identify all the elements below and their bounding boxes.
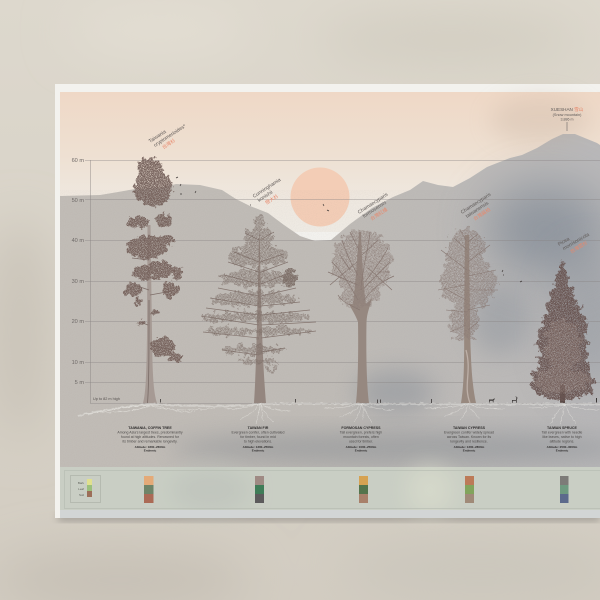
- description: Formosan cypress: Altitude: 1000–2500m: [346, 445, 377, 449]
- tree: Taiwania: [124, 158, 183, 403]
- poster drop shadow: [58, 513, 600, 521]
- description: Taiwan coffin tree: its timber and remarkable longevity.: [122, 440, 178, 444]
- label: Chamaecyparis taiwanensis: taiwanensis: [465, 200, 490, 220]
- label: Chamaecyparis taiwanensis: [460, 191, 499, 226]
- Xueshan peak callout: (Snow mountain): [553, 113, 582, 117]
- sun: [290, 168, 350, 226]
- description: Taiwan spruce: Tall evergreen with needle: [542, 430, 582, 434]
- legend key: Soil: [79, 493, 84, 497]
- description: Taiwan coffin tree: [117, 426, 183, 452]
- description: Formosan cypress: [340, 426, 382, 452]
- label: Chamaecyparis formosensis: formosensis: [362, 200, 388, 220]
- height scale: 30 m: [72, 279, 84, 285]
- legend key: [70, 476, 100, 502]
- people and animals for scale: [160, 396, 597, 403]
- species descriptions: [117, 426, 582, 452]
- description: Taiwan cypress: [444, 426, 494, 452]
- label: Chamaecyparis formosensis: Chamaecyparis: [357, 191, 390, 216]
- height scale: 10 m: [72, 360, 84, 366]
- label: Chamaecyparis taiwanensis: 台灣扁柏: [472, 206, 492, 222]
- height scale: 20 m: [72, 319, 84, 325]
- light and leaf shadows: [170, 96, 600, 464]
- poster frame: [55, 84, 600, 518]
- description: Formosan cypress: Endemic: [355, 448, 368, 452]
- label: Chamaecyparis taiwanensis: Chamaecyparis: [460, 191, 493, 216]
- description: Taiwan coffin tree: TAIWANIA, COFFIN TREE: [128, 426, 172, 430]
- film grain: [60, 190, 600, 468]
- description: Taiwan spruce: TAIWAN SPRUCE: [547, 426, 578, 430]
- description: Taiwan cypress: Evergreen conifer widely spread: [444, 430, 494, 434]
- description: Taiwan fir: TAIWAN FIR: [248, 426, 269, 430]
- height scale: 40 m: [72, 238, 84, 244]
- description: Formosan cypress: Tall evergreen, prefers high: [340, 430, 382, 434]
- label: Picea: morrisonicola: [562, 232, 591, 252]
- legend key: Leaf: [78, 487, 84, 491]
- mountain ridge: [60, 134, 600, 467]
- Xueshan peak callout: [551, 106, 584, 131]
- label: Taiwania: 台灣杉: [161, 137, 177, 151]
- tree: Formosan cypress: [328, 230, 394, 403]
- label: Chamaecyparis formosensis: [357, 191, 396, 226]
- legend key: Bark: [78, 481, 84, 485]
- Xueshan peak callout: 3,886 m: [560, 118, 574, 122]
- label: Cunninghamia: [252, 177, 289, 210]
- tree: Taiwan cypress: [438, 228, 498, 403]
- height scale: 50 m: [72, 198, 84, 204]
- tree: Taiwan spruce: [528, 260, 596, 403]
- description: Taiwan cypress: Endemic: [463, 448, 476, 452]
- description: Taiwan fir: to high elevations.: [244, 440, 272, 444]
- colour swatches: Taiwan spruce: [560, 476, 568, 503]
- height scale: [72, 158, 600, 404]
- height scale: 60 m: [72, 158, 84, 164]
- colour swatches: Taiwania: [144, 476, 154, 503]
- description: Taiwan coffin tree: found at high altitudes. Renowned for: [121, 435, 180, 439]
- height scale: 5 m: [75, 380, 84, 386]
- description: Taiwan spruce: [542, 426, 582, 452]
- colour swatches: Taiwan fir: [255, 476, 264, 503]
- birds: [176, 177, 522, 282]
- description: Taiwan cypress: Altitude: 1300–2800m: [454, 445, 485, 449]
- description: Taiwan fir: [232, 426, 285, 452]
- description: Taiwan coffin tree: Altitude: 1800–2600m: [135, 445, 166, 449]
- label: Taiwania: Taiwania: [148, 129, 168, 145]
- poster bottom margin: [60, 510, 600, 518]
- roots: [78, 404, 600, 425]
- description: Taiwan coffin tree: Among Asia's largest trees, predominantly: [117, 430, 183, 434]
- description: Taiwan spruce: like leaves, native to high: [542, 435, 582, 439]
- label: Cunninghamia: konishii: [257, 189, 274, 204]
- label: Picea: [557, 227, 594, 259]
- description: Taiwan fir: Endemic: [252, 448, 265, 452]
- description: Taiwan fir: Altitude: 1300–2500m: [243, 445, 274, 449]
- description: Formosan cypress: FORMOSAN CYPRESS: [341, 426, 381, 430]
- label: Cunninghamia: 巒大杉: [264, 193, 280, 206]
- colour legend band: [60, 466, 600, 514]
- label: Picea: Picea: [557, 236, 571, 248]
- description: Taiwan spruce: altitude regions.: [550, 440, 574, 444]
- description: Taiwan fir: for timber, found in mid: [240, 435, 276, 439]
- species labels: [148, 118, 594, 259]
- description: Taiwan spruce: Altitude: 2500–3000m: [547, 445, 578, 449]
- description: Taiwan fir: Evergreen conifer, often cultivated: [232, 430, 285, 434]
- description: Taiwan cypress: TAIWAN CYPRESS: [453, 426, 486, 430]
- description: Formosan cypress: mountain forests, often: [343, 435, 379, 439]
- colour swatches: Taiwan cypress: [465, 476, 474, 503]
- label: Taiwania: [148, 118, 191, 155]
- description: Formosan cypress: used for timber.: [349, 440, 373, 444]
- label: Cunninghamia: Cunninghamia: [252, 177, 282, 200]
- description: Taiwan cypress: across Taiwan. Known for its: [447, 435, 491, 439]
- poster sky: [60, 92, 600, 232]
- description: Taiwan coffin tree: Endemic: [144, 448, 157, 452]
- description: Taiwan cypress: longevity and resilience.: [450, 440, 488, 444]
- label: Picea: 台灣雲杉: [569, 239, 589, 255]
- label: Taiwania: cryptomerioides*: [153, 123, 187, 149]
- tree: Cunninghamia: [201, 216, 316, 403]
- label: Chamaecyparis formosensis: 台灣紅檜: [369, 206, 389, 222]
- colour swatches: Formosan cypress: [359, 476, 368, 503]
- height scale: Up to 82 m high: [93, 397, 120, 401]
- description: Taiwan spruce: Endemic: [556, 448, 569, 452]
- Xueshan peak callout: XUESHAN 雪山: [551, 106, 584, 113]
